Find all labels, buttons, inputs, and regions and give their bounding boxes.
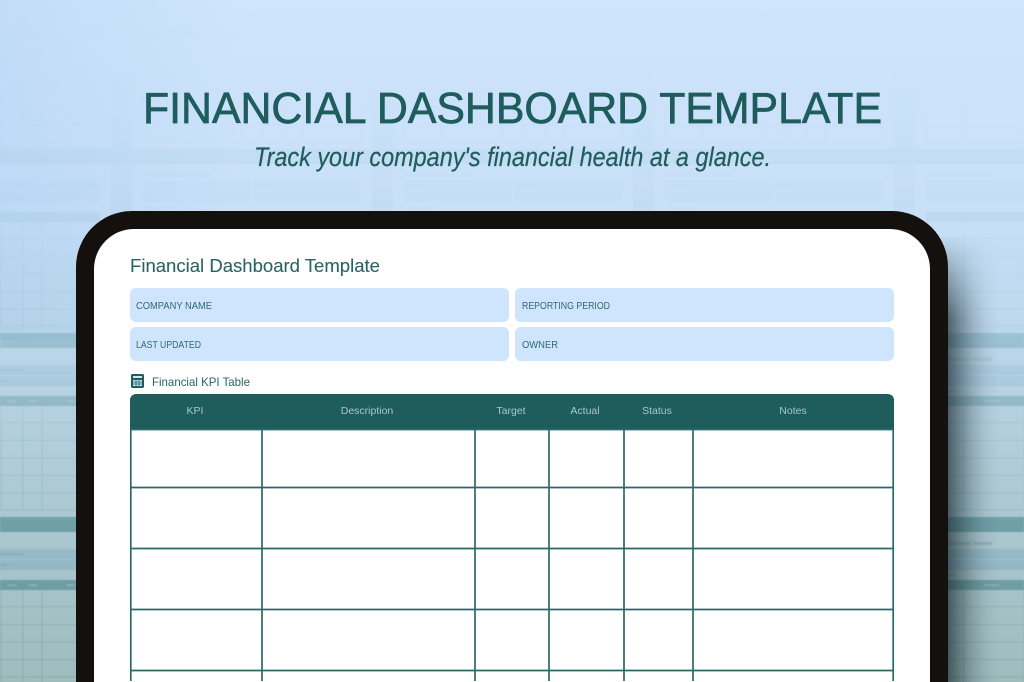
field: reporting period: REPORTING PERIOD: [522, 301, 610, 312]
background: faded dashboard tiles: Reporting Period: [775, 185, 798, 189]
table header row: KPI: [187, 405, 203, 417]
field: company name: [130, 288, 509, 322]
background: faded dashboard tiles: Financial Dashboard Template: [404, 173, 472, 179]
field: last updated: LAST UPDATED: [136, 340, 201, 351]
background: faded dashboard tiles: Owner: [775, 196, 784, 200]
background: faded dashboard tiles: Notes: [67, 215, 75, 219]
background: faded dashboard tiles: Reporting Period: [0, 552, 23, 556]
table header row: Target: [496, 405, 526, 417]
background: faded dashboard tiles: Notes: [67, 583, 75, 587]
tablet screen: [94, 229, 930, 682]
icon: calculator: [131, 374, 144, 388]
background: faded dashboard tiles: Description: [984, 215, 1000, 219]
background: faded dashboard tiles: Reporting Period: [0, 368, 23, 372]
background: faded dashboard tiles: Company Name: [665, 185, 687, 189]
background: faded dashboard tiles: Notes: [67, 399, 75, 403]
table header row: Notes: [779, 405, 807, 417]
background: faded dashboard tiles: Actual: [8, 215, 16, 219]
device shadow: [942, 240, 990, 682]
background: faded dashboard tiles: Last Updated: [665, 196, 683, 200]
field: last updated: [130, 327, 509, 361]
background: faded dashboard tiles: Description: [984, 399, 1000, 403]
background: faded dashboard tiles: Company Name: [404, 185, 426, 189]
background: faded dashboard tiles: Status: [29, 583, 38, 587]
background: faded dashboard tiles: Owner: [514, 196, 523, 200]
background: faded dashboard tiles: Financial Dashboard Template: [925, 541, 993, 547]
background: faded dashboard tiles: Reporting Period: [514, 185, 537, 189]
field: owner: OWNER: [522, 340, 558, 351]
background: faded dashboard tiles: Financial Dashboard Template: [925, 357, 993, 363]
table header row: Actual: [570, 405, 600, 417]
section heading: Financial KPI Table: [152, 375, 250, 389]
background: faded dashboard tiles: Actual: [8, 399, 16, 403]
field: reporting period: [515, 288, 894, 322]
background: faded dashboard tiles: Financial KPI Table: [670, 206, 696, 210]
background: faded dashboard tiles: Financial Dashboard Template: [143, 173, 211, 179]
background: faded dashboard tiles: Financial KPI Table: [930, 389, 956, 393]
table header row: [130, 394, 894, 429]
tablet frame: [76, 211, 948, 682]
table header row: Status: [642, 405, 672, 417]
background: faded dashboard tiles: Last Updated: [143, 196, 161, 200]
background: faded dashboard tiles: Financial KPI Table: [148, 206, 174, 210]
KPI table: [130, 394, 894, 681]
background: faded dashboard tiles: Financial KPI Table: [930, 573, 956, 577]
background: faded dashboard tiles: Status: [29, 215, 38, 219]
background: faded dashboard tiles: Financial Dashboard Template: [665, 173, 733, 179]
background left edge tint: [0, 0, 240, 340]
background: faded dashboard tiles: Owner: [253, 196, 262, 200]
background: faded dashboard tiles: Company Name: [143, 185, 165, 189]
background: faded dashboard tiles: [0, 213, 1024, 682]
field: company name: COMPANY NAME: [136, 301, 212, 312]
background: faded dashboard tiles: Actual: [8, 583, 16, 587]
background: faded dashboard tiles: Last Updated: [404, 196, 422, 200]
table header row: Description: [341, 405, 393, 417]
background: faded dashboard tiles: Owner: [0, 379, 9, 383]
background: faded dashboard tiles: Description: [984, 583, 1000, 587]
background: faded dashboard tiles: Reporting Period: [253, 185, 276, 189]
tablet device mockup: [76, 211, 948, 682]
subtitle: Track your company's financial health at a glance.: [254, 142, 771, 172]
background: faded dashboard tiles: Status: [29, 399, 38, 403]
background: faded dashboard tiles: Financial Dashboard Template: [925, 173, 993, 179]
table grid: [130, 429, 894, 681]
background: faded dashboard tiles: Financial KPI Table: [409, 206, 435, 210]
field: owner: [515, 327, 894, 361]
document heading: Financial Dashboard Template: [130, 256, 380, 276]
background: faded dashboard tiles: Owner: [0, 563, 9, 567]
title: FINANCIAL DASHBOARD TEMPLATE: [143, 84, 882, 133]
